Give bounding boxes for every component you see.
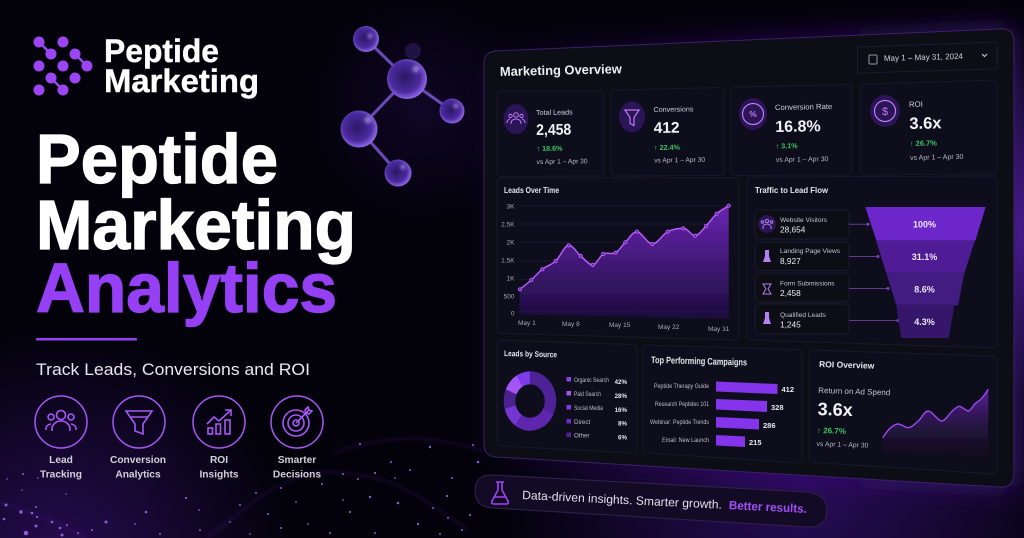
callout text (522, 488, 807, 516)
ROI sparkline (883, 389, 988, 456)
area chart: 0 (511, 310, 515, 318)
funnel chart: 4.3% (914, 317, 935, 327)
source legend: 16% (615, 407, 627, 414)
icon: ROI chart (193, 396, 245, 448)
KPI: total leads: 2,458 (536, 122, 572, 139)
icon labels: Smarter (278, 455, 316, 466)
flow rows: 8,927 (780, 256, 801, 266)
flow rows: 28,654 (780, 224, 806, 234)
main title: Marketing (36, 186, 356, 264)
KPI: conversions: Conversions (653, 104, 694, 114)
icon labels: Conversion (110, 455, 166, 466)
KPI: ROI: ROI (909, 100, 923, 109)
source legend: Organic Search (574, 377, 609, 384)
chart heading: Leads Over Time (504, 186, 559, 195)
campaigns heading: Top Performing Campaigns (651, 355, 747, 369)
KPI: total leads: Total Leads (536, 107, 573, 117)
flow rows: Landing Page Views (780, 248, 841, 255)
bar chart: 286 (763, 421, 776, 430)
dashboard title: Marketing Overview (500, 61, 623, 79)
panel: top performing campaigns (643, 345, 802, 463)
icon: lead tracking (35, 396, 87, 448)
KPI: ROI: ↑ 26.7% (910, 138, 937, 148)
funnel chart (866, 208, 985, 338)
main title (36, 120, 356, 327)
bar chart: Webinar: Peptide Trends (650, 420, 709, 426)
area chart: 1.5K (501, 258, 515, 264)
KPI: conversion rate: vs Apr 1 – Apr 30 (776, 156, 829, 164)
logo (34, 33, 259, 99)
funnel chart: 100% (913, 220, 936, 230)
icon: flask (492, 482, 508, 504)
area chart: May 31 (708, 326, 730, 333)
main title: Analytics (36, 249, 337, 327)
logo mark (34, 36, 92, 96)
area chart: May 8 (562, 321, 580, 328)
icon: conversion funnel (113, 396, 165, 448)
flow rows (755, 210, 900, 334)
KPI: conversions: ↑ 22.4% (654, 143, 681, 152)
area chart: 2K (507, 240, 515, 246)
area chart: 2.5K (501, 222, 515, 228)
panel: leads by source (497, 340, 637, 453)
source legend: 42% (615, 379, 627, 386)
icon labels: Decisions (273, 470, 321, 480)
logo wordmark: Marketing (104, 63, 259, 99)
funnel chart: 31.1% (912, 252, 937, 262)
ROI text: ROI Overview (819, 359, 875, 371)
flow rows: 1,245 (780, 320, 801, 330)
panel: ROI overview (809, 350, 997, 474)
bar chart: Research Peptides 101 (655, 402, 710, 408)
area chart: 1K (507, 276, 515, 282)
bar chart: Email: New Launch (662, 438, 709, 444)
source legend: Paid Search (574, 391, 601, 398)
ROI text: ↑ 26.7% (817, 426, 846, 436)
molecule illustration (340, 26, 464, 186)
source legend: Other (574, 432, 589, 440)
flow rows: Qualified Leads (780, 312, 827, 319)
bar chart: 215 (749, 438, 762, 447)
donut chart (501, 369, 559, 433)
icon labels: Insights (199, 470, 239, 480)
logo wordmark: Peptide (104, 33, 219, 69)
KPI: total leads: vs Apr 1 – Apr 30 (537, 158, 588, 166)
icon labels: Lead (49, 455, 73, 466)
area chart: May 22 (658, 324, 680, 331)
callout pill (475, 475, 827, 527)
KPI: conversion rate: ↑ 3.1% (776, 141, 798, 150)
flow rows: 2,458 (780, 288, 801, 298)
bar chart: Peptide Therapy Guide (654, 384, 710, 390)
source legend: 28% (615, 393, 627, 400)
KPI: total leads (497, 91, 604, 176)
icon labels: Tracking (40, 470, 82, 480)
KPI: conversion rate: 16.8% (775, 118, 821, 136)
icon labels: Analytics (115, 470, 161, 480)
flow rows: Form Submissions (780, 280, 835, 288)
divider line (36, 338, 137, 340)
source heading: Leads by Source (504, 349, 558, 359)
flow heading: Traffic to Lead Flow (755, 185, 828, 195)
icon labels (40, 455, 321, 480)
ROI text: Return on Ad Spend (818, 386, 890, 397)
KPI: ROI: 3.6x (909, 114, 942, 133)
bar chart (650, 382, 794, 447)
source legend: 6% (618, 434, 627, 442)
source legend: 8% (618, 420, 627, 428)
bar chart: 412 (782, 385, 794, 394)
icon labels: ROI (210, 455, 228, 466)
bar chart: 328 (771, 403, 784, 412)
panel: dashboard (484, 29, 1014, 487)
KPI: ROI: $ (882, 106, 888, 118)
icon: target (271, 396, 323, 448)
tagline: Track Leads, Conversions and ROI (36, 360, 310, 379)
KPI: ROI (860, 80, 997, 175)
KPI: conversion rate: % (749, 109, 757, 119)
area chart: May 1 (518, 320, 536, 327)
KPI: conversion rate (731, 84, 852, 176)
KPI: ROI: vs Apr 1 – Apr 30 (910, 154, 964, 162)
KPI: conversions: 412 (654, 120, 680, 137)
callout text: Data-driven insights. Smarter growth. (522, 488, 722, 512)
area chart: May 15 (609, 322, 631, 329)
source legend: Social Media (574, 405, 603, 412)
area chart (501, 204, 730, 333)
date selector: May 1 – May 31, 2024 (884, 52, 963, 63)
date selector (858, 42, 997, 73)
KPI: conversions: vs Apr 1 – Apr 30 (654, 157, 705, 164)
panel: traffic to lead flow (747, 176, 997, 348)
KPI: conversions (611, 88, 724, 176)
KPI: conversion rate: Conversion Rate (775, 102, 832, 112)
ROI text (816, 359, 891, 450)
source legend (566, 377, 627, 442)
source legend: Direct (574, 419, 590, 426)
flow rows: Website Visitors (780, 217, 828, 224)
area chart: 500 (504, 294, 515, 300)
benefit icons (35, 396, 323, 480)
funnel chart: 8.6% (914, 284, 935, 294)
ROI text: 3.6x (817, 399, 853, 420)
callout text: Better results. (729, 498, 807, 516)
area chart: 3K (507, 204, 515, 210)
main title: Peptide (36, 120, 278, 198)
KPI: total leads: ↑ 18.6% (536, 144, 563, 153)
panel: leads over time (497, 178, 739, 340)
ROI text: vs Apr 1 – Apr 30 (816, 441, 869, 450)
